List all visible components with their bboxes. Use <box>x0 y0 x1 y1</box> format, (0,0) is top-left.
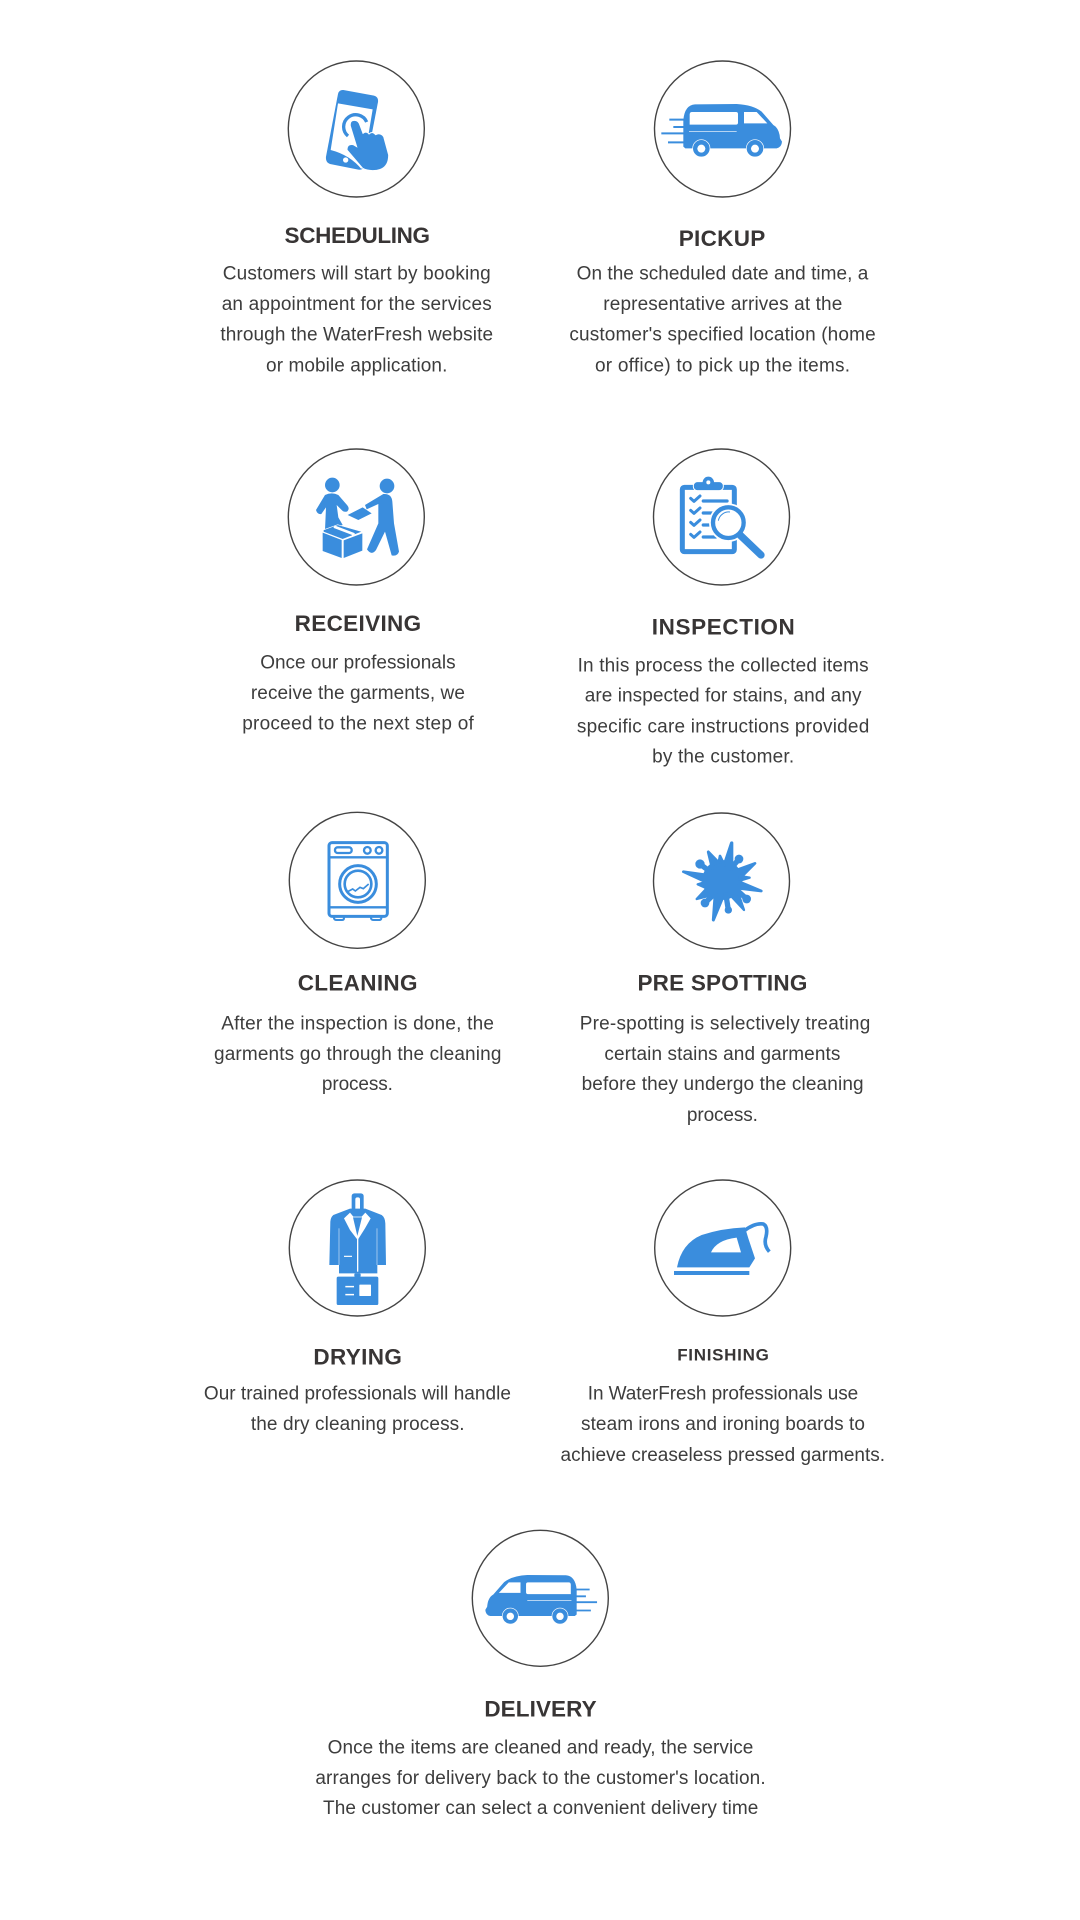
text block: Once our professionals <box>260 653 456 674</box>
text block <box>204 1383 511 1435</box>
text block: In this process the collected items <box>578 656 869 677</box>
text block: receive the garments, we <box>251 683 465 704</box>
text block: garments go through the cleaning <box>214 1044 501 1065</box>
panel: drying <box>204 1180 511 1435</box>
text block: an appointment for the services <box>222 294 492 315</box>
panel: delivery <box>315 1530 766 1819</box>
text block: The customer can select a convenient delivery time <box>323 1798 758 1819</box>
panel: cleaning <box>214 812 501 1095</box>
text block: through the WaterFresh website <box>220 324 493 346</box>
heading: PICKUP <box>679 226 765 251</box>
panel: pre spotting <box>580 813 870 1126</box>
text block: specific care instructions provided <box>577 716 869 737</box>
text block <box>569 263 876 376</box>
heading: INSPECTION <box>652 615 795 640</box>
text block: Our trained professionals will handle <box>204 1383 511 1404</box>
panel: finishing <box>561 1180 885 1466</box>
text block: In WaterFresh professionals use <box>588 1383 858 1404</box>
panel: scheduling <box>220 61 493 376</box>
text block <box>577 656 869 767</box>
text block: are inspected for stains, and any <box>585 686 862 707</box>
icon: stain splat <box>654 813 790 949</box>
icon: van moving <box>654 61 790 197</box>
text block <box>561 1383 885 1466</box>
text block <box>315 1737 766 1819</box>
text block: certain stains and garments <box>604 1044 840 1065</box>
icon: steam iron <box>655 1180 791 1316</box>
panel: inspection <box>577 449 869 767</box>
text block: achieve creaseless pressed garments. <box>561 1445 885 1466</box>
text block: proceed to the next step of <box>242 714 475 734</box>
text block <box>580 1013 870 1126</box>
heading: RECEIVING <box>295 611 421 636</box>
text block: before they undergo the cleaning <box>582 1074 864 1095</box>
heading: PRE SPOTTING <box>637 971 807 996</box>
text block: or mobile application. <box>266 355 447 376</box>
text block: representative arrives at the <box>603 294 842 315</box>
icon: phone with tapping hand <box>288 61 424 197</box>
text block <box>242 653 475 734</box>
text block: process. <box>322 1074 393 1095</box>
panel: receiving <box>242 449 475 734</box>
icon: handover of a box <box>288 449 424 585</box>
text block: the dry cleaning process. <box>251 1414 465 1435</box>
heading: DRYING <box>313 1345 402 1370</box>
text block: or office) to pick up the items. <box>595 355 850 376</box>
text block: steam irons and ironing boards to <box>581 1414 865 1435</box>
heading: FINISHING <box>677 1346 769 1365</box>
text block: On the scheduled date and time, a <box>577 263 869 284</box>
icon: van returning <box>472 1530 608 1666</box>
text block <box>214 1013 501 1095</box>
text block: by the customer. <box>652 746 794 767</box>
text block: customer's specified location (home <box>569 324 876 346</box>
icon: washing machine <box>289 812 425 948</box>
text block: Once the items are cleaned and ready, the service <box>328 1737 753 1758</box>
heading: DELIVERY <box>484 1697 597 1722</box>
text block <box>220 263 493 376</box>
text block: After the inspection is done, the <box>221 1013 494 1034</box>
heading: SCHEDULING <box>285 223 430 248</box>
panel: pickup <box>569 61 876 376</box>
text block: process. <box>687 1105 758 1126</box>
text block: arranges for delivery back to the customer's location. <box>315 1768 766 1789</box>
heading: CLEANING <box>298 971 418 996</box>
text block: Customers will start by booking <box>223 263 491 284</box>
text block: Pre-spotting is selectively treating <box>580 1013 870 1034</box>
icon: clipboard and magnifier <box>654 449 790 585</box>
icon: coat on hanger with tag <box>289 1180 425 1316</box>
